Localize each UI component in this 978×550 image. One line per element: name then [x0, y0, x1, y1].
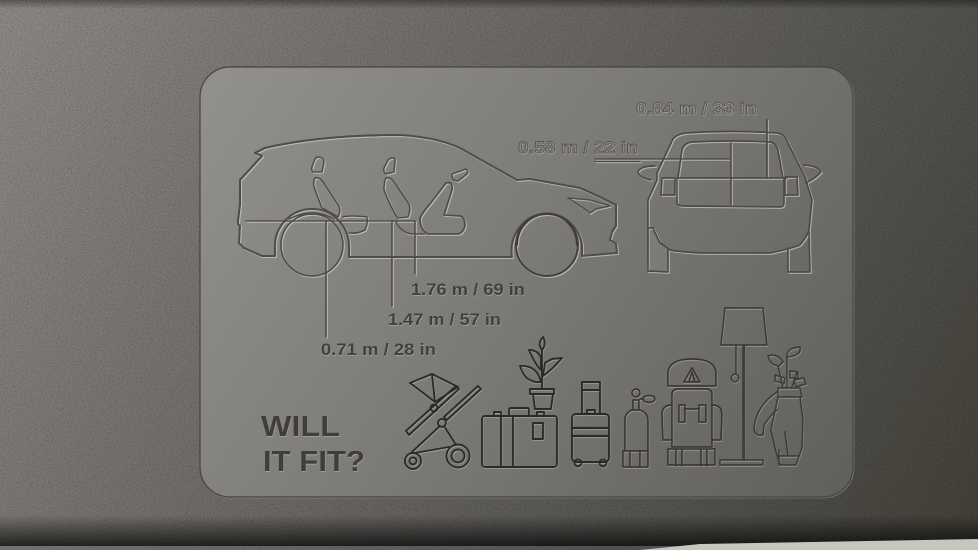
dimension line: 1.76 m [414, 221, 416, 274]
dimension line: 0.84 m [766, 120, 768, 178]
headlight [568, 198, 610, 213]
car rear view diagram [595, 120, 821, 272]
front wheel arch inner [517, 214, 577, 245]
icon: wheeled luggage [572, 382, 609, 466]
rear window [678, 141, 783, 178]
middle seat back [384, 178, 410, 218]
right mirror [804, 165, 821, 183]
front seat [420, 183, 465, 234]
icon: gas bottle [623, 389, 655, 467]
icon: floor lamp [720, 308, 767, 465]
heading: will it fit: WILL [261, 411, 340, 443]
rear seat cushion [343, 216, 367, 233]
left tail light [661, 178, 675, 195]
label: 0.84 m: 0.84 m / 33 in [636, 100, 757, 118]
label: 1.76 m: 1.76 m / 69 in [411, 281, 525, 299]
dimension line: length baseline [246, 220, 415, 222]
middle seat cushion [396, 222, 425, 234]
left mud flap [648, 228, 668, 272]
centre divider [730, 143, 732, 205]
icon: backpack [662, 359, 722, 466]
dimension line: 1.47 m [391, 221, 393, 306]
car side view diagram [238, 135, 617, 337]
label: 0.58 m: 0.58 m / 22 in [518, 139, 638, 157]
right tyre [788, 232, 810, 272]
car body outline [648, 132, 812, 253]
rear wheel arch inner [289, 213, 334, 219]
icon: suitcase [482, 408, 557, 467]
front headrest [452, 169, 468, 181]
right tail light [785, 177, 798, 195]
heading: will it fit: IT FIT? [263, 446, 365, 478]
left mirror [638, 166, 655, 180]
rear wheel [281, 214, 343, 276]
icon: golf bag [754, 347, 806, 465]
dimension line: 0.71 m [325, 221, 327, 337]
car body outline [238, 135, 617, 257]
front wheel [516, 214, 578, 276]
icon: potted plant [520, 337, 562, 409]
icon: stroller [405, 374, 481, 469]
boot opening [677, 178, 787, 207]
recessed plate [200, 67, 854, 498]
rear headrest [312, 157, 324, 172]
label: 1.47 m: 1.47 m / 57 in [388, 311, 501, 329]
middle headrest [384, 158, 395, 174]
rear seat back [314, 178, 340, 217]
dimension line: 0.58 m [595, 159, 730, 162]
label: 0.71 m: 0.71 m / 28 in [321, 341, 436, 359]
icons row: items that fit [405, 308, 806, 469]
